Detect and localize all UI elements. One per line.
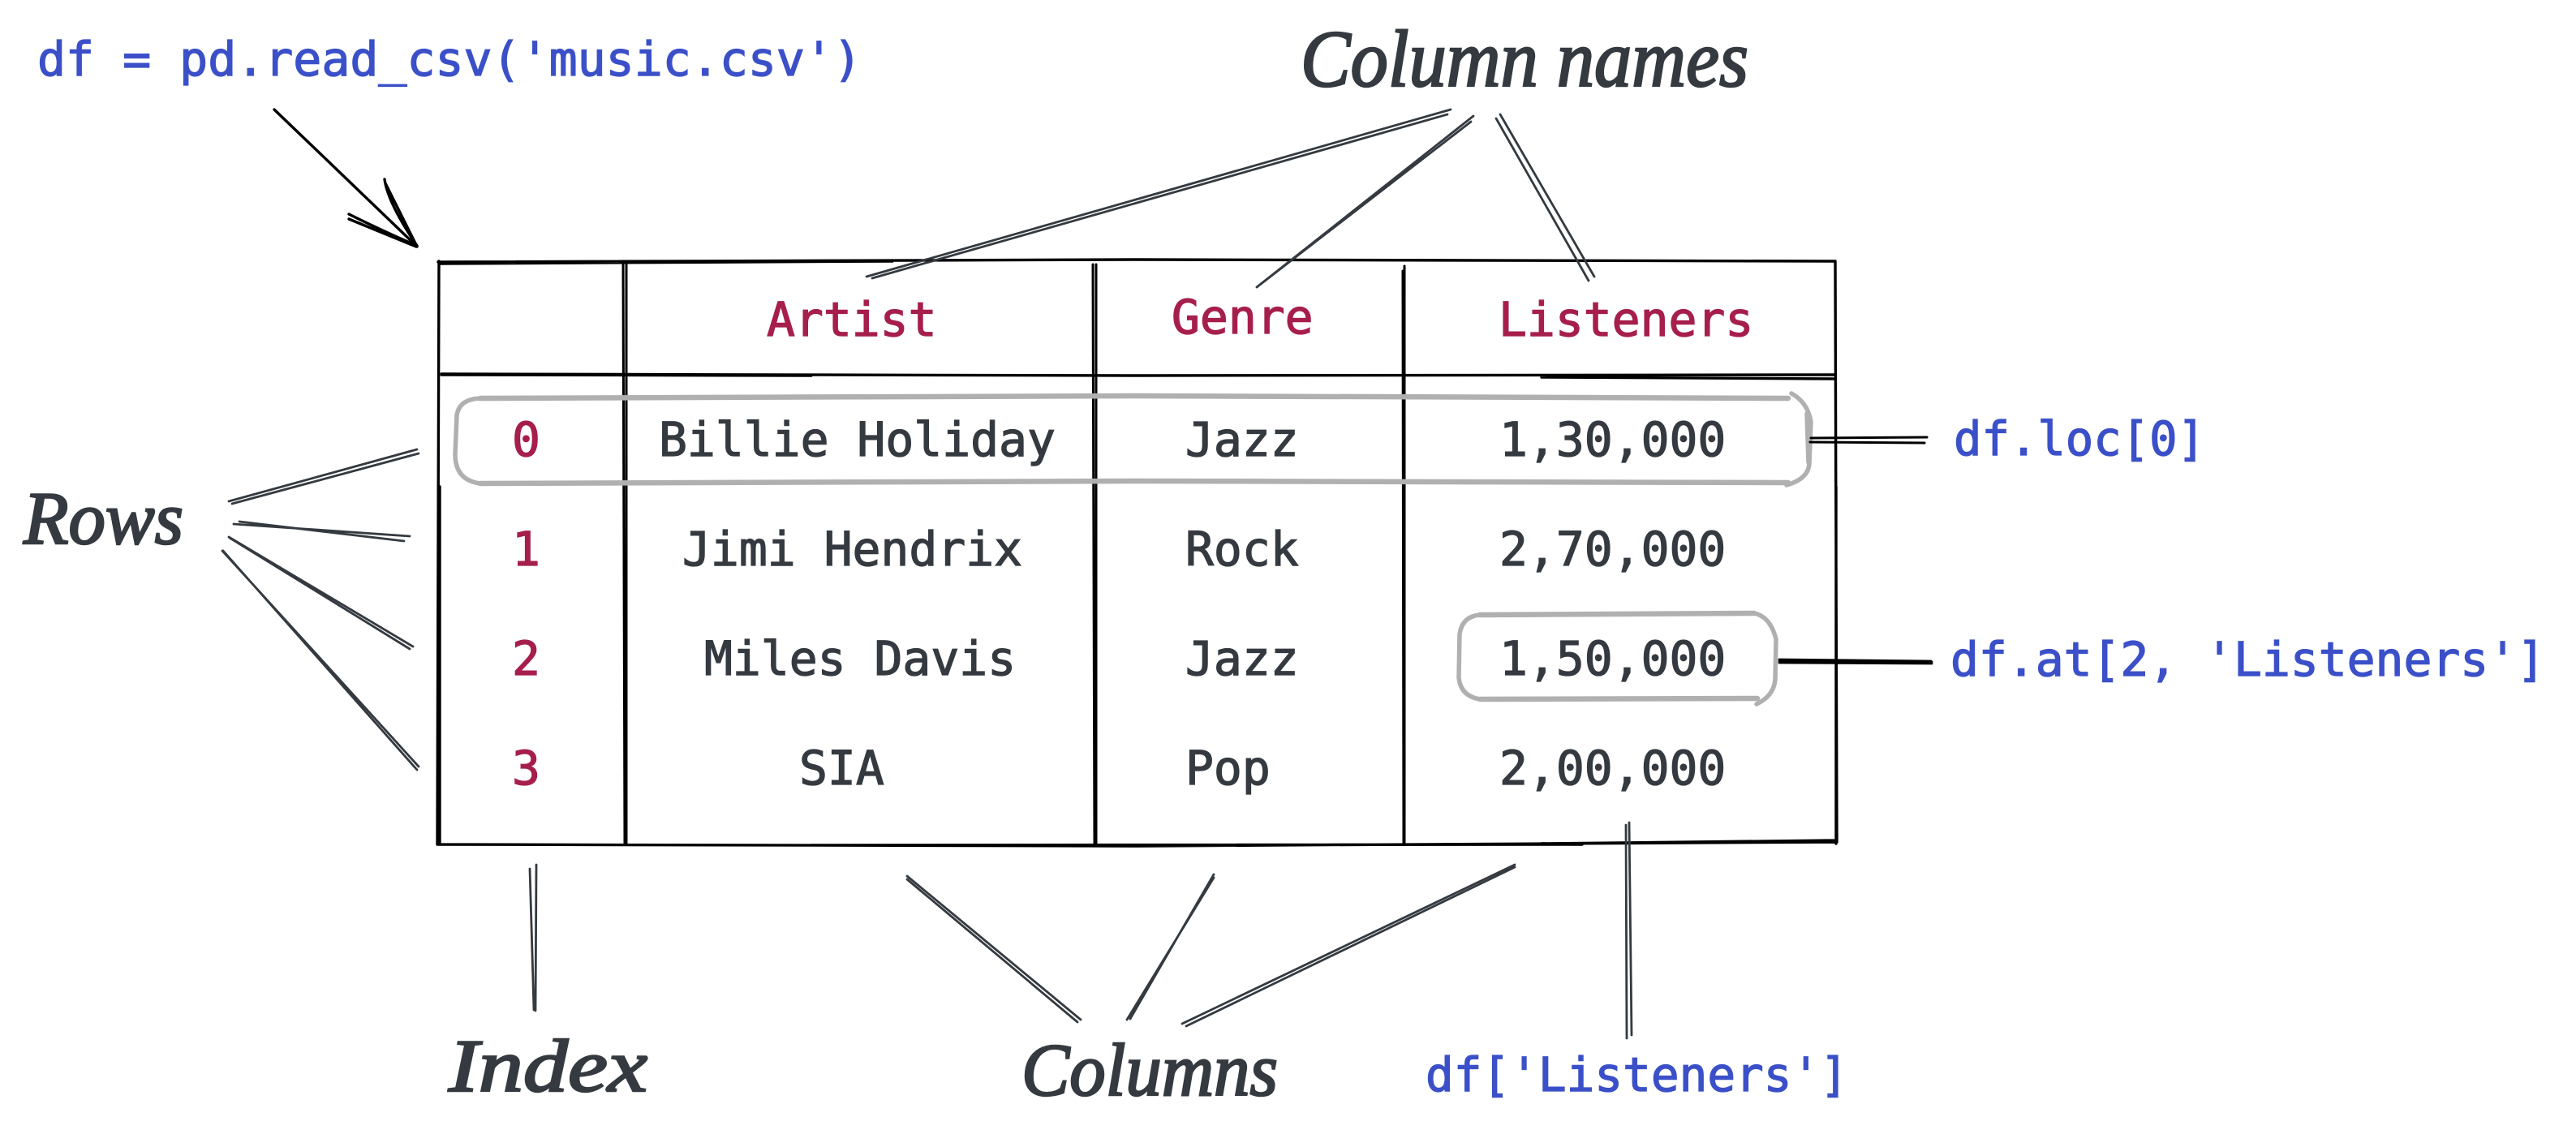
header rule — [441, 374, 1835, 379]
column header text — [767, 290, 1753, 347]
column header text: Genre — [1172, 290, 1314, 345]
column header text: Listeners — [1499, 292, 1753, 347]
code label: df Listeners: df['Listeners'] — [1426, 1047, 1848, 1102]
hand label: Index: Index — [448, 1025, 647, 1107]
lines: rows — [222, 449, 419, 770]
column rules — [623, 264, 1404, 844]
row 2: 2 — [512, 631, 540, 686]
row 1 — [512, 522, 1726, 577]
hand label: Column names: Column names — [1301, 14, 1748, 104]
row 3 — [512, 741, 1726, 796]
row 1: Rock — [1185, 522, 1299, 577]
line: index — [530, 865, 536, 1011]
row 2: Jazz — [1185, 631, 1299, 686]
arrow: read_csv to table — [274, 110, 417, 247]
row 0: 1,30,000 — [1499, 412, 1726, 467]
hand label: Rows: Rows — [23, 477, 183, 560]
code label: df.at: df.at[2, 'Listeners'] — [1950, 632, 2545, 687]
row 0: Jazz — [1185, 412, 1299, 467]
connector: df.loc — [1810, 437, 1927, 443]
row 2: 1,50,000 — [1499, 631, 1726, 686]
column header text: Artist — [767, 292, 937, 347]
row 3: 2,00,000 — [1499, 741, 1726, 796]
row 2: Miles Davis — [704, 631, 1016, 686]
line: df listeners column — [1626, 823, 1632, 1038]
code label: df.loc: df.loc[0] — [1954, 411, 2205, 466]
row 0: Billie Holiday — [659, 412, 1056, 467]
lines: column names to headers — [867, 110, 1594, 287]
row 3: Pop — [1185, 741, 1271, 796]
row 1: 2,70,000 — [1499, 522, 1726, 577]
code label: read_csv: df = pd.read_csv('music.csv') — [37, 32, 862, 87]
highlight: row 0 box — [455, 393, 1811, 485]
connector: df.at — [1779, 659, 1932, 664]
row 1: 1 — [512, 522, 540, 577]
highlight: cell box — [1459, 613, 1776, 704]
hand label: Columns: Columns — [1021, 1029, 1278, 1111]
row 3: SIA — [799, 741, 884, 796]
table grid — [437, 260, 1837, 846]
lines: columns — [907, 865, 1515, 1026]
row 2 — [512, 631, 1726, 686]
row 1: Jimi Hendrix — [682, 522, 1022, 577]
row 0: 0 — [512, 412, 540, 467]
row 3: 3 — [512, 741, 540, 796]
row 0 — [512, 412, 1726, 467]
table outer border — [437, 260, 1837, 846]
